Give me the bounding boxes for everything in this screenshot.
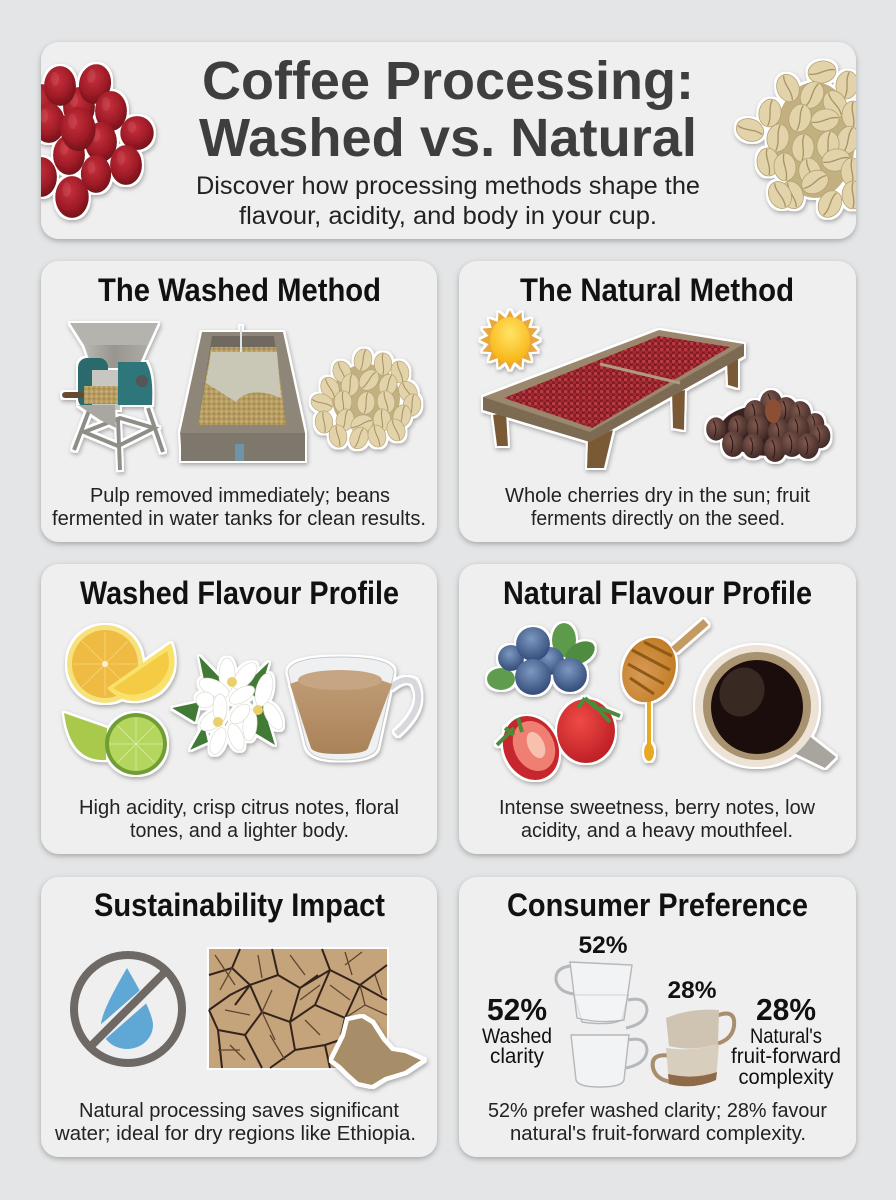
description (499, 796, 815, 842)
panel: header (25, 42, 864, 239)
subtitle (196, 172, 700, 230)
description: acidity, and a heavy mouthfeel. (521, 819, 793, 842)
icon: black coffee cup (695, 645, 836, 768)
label: 28 percent natural complexity: Natural's (750, 1025, 822, 1048)
icon: stacked glass cups (556, 962, 647, 1087)
icon: lime (64, 713, 167, 775)
icon: stacked ceramic mugs (653, 1010, 734, 1086)
icon: no water (74, 955, 182, 1063)
heading: Sustainability Impact (94, 887, 385, 923)
subtitle: flavour, acidity, and body in your cup. (239, 202, 657, 230)
icon: pulping machine (62, 323, 163, 470)
heading: The Washed Method (98, 272, 381, 308)
description: Intense sweetness, berry notes, low (499, 796, 815, 819)
icon: blueberries (487, 623, 599, 695)
image: cracked earth (207, 947, 389, 1070)
heading: Consumer Preference (507, 887, 808, 923)
description: natural's fruit-forward complexity. (510, 1122, 806, 1145)
icon: strawberries (493, 698, 620, 789)
description: fermented in water tanks for clean results. (52, 507, 426, 530)
icon: washed beans (308, 347, 423, 452)
icon: coffee cherries (25, 62, 154, 218)
description (52, 484, 426, 530)
description: Pulp removed immediately; beans (90, 484, 390, 507)
icon: green beans (733, 59, 864, 222)
icon: dried cherries (706, 390, 830, 462)
label: 52 percent washed clarity: 52% (487, 992, 547, 1027)
description: High acidity, crisp citrus notes, floral (79, 796, 399, 819)
title (199, 51, 697, 168)
heading: Natural Flavour Profile (503, 575, 812, 611)
icon: glass of light coffee (288, 657, 418, 760)
panel: natural flavour profile (459, 564, 856, 854)
panel: consumer preference (459, 877, 856, 1157)
label: 52 percent washed clarity (482, 992, 552, 1068)
panel: the washed method (41, 261, 437, 542)
icon: honey dipper (613, 622, 706, 761)
panel: washed flavour profile (41, 564, 437, 854)
description (505, 484, 810, 530)
heading: The Natural Method (520, 272, 794, 308)
description (79, 796, 399, 842)
panel: the natural method (459, 261, 856, 542)
label: 28 percent natural complexity: 28% (756, 992, 816, 1027)
title: Coffee Processing: (202, 51, 694, 111)
title: Washed vs. Natural (199, 108, 697, 168)
description (54, 1099, 416, 1145)
panel: sustainability impact (41, 877, 437, 1157)
icon: lemon (67, 625, 175, 703)
label: 52 percent above glasses: 52% (578, 932, 628, 959)
label: 28 percent natural complexity (731, 992, 841, 1089)
label: 52 percent washed clarity: Washed (482, 1025, 552, 1048)
label: 52 percent washed clarity: clarity (490, 1045, 544, 1068)
description (488, 1099, 827, 1145)
description: ferments directly on the seed. (531, 507, 785, 530)
icon: sun (480, 310, 540, 370)
label: 28 percent natural complexity: complexity (738, 1066, 834, 1089)
heading: Washed Flavour Profile (80, 575, 399, 611)
description: Natural processing saves significant (79, 1099, 399, 1122)
label: 28 percent above mugs: 28% (668, 977, 716, 1004)
icon: drying bed (483, 330, 744, 468)
icon: orange blossom (172, 656, 287, 757)
icon: fermentation tank (180, 326, 305, 461)
icon: map of Ethiopia (332, 1017, 423, 1086)
subtitle: Discover how processing methods shape the (196, 172, 700, 200)
description: 52% prefer washed clarity; 28% favour (488, 1099, 827, 1122)
description: water; ideal for dry regions like Ethiopia. (54, 1122, 416, 1145)
description: Whole cherries dry in the sun; fruit (505, 484, 810, 507)
description: tones, and a lighter body. (130, 819, 349, 842)
label: 28 percent natural complexity: fruit-forward (731, 1045, 841, 1068)
